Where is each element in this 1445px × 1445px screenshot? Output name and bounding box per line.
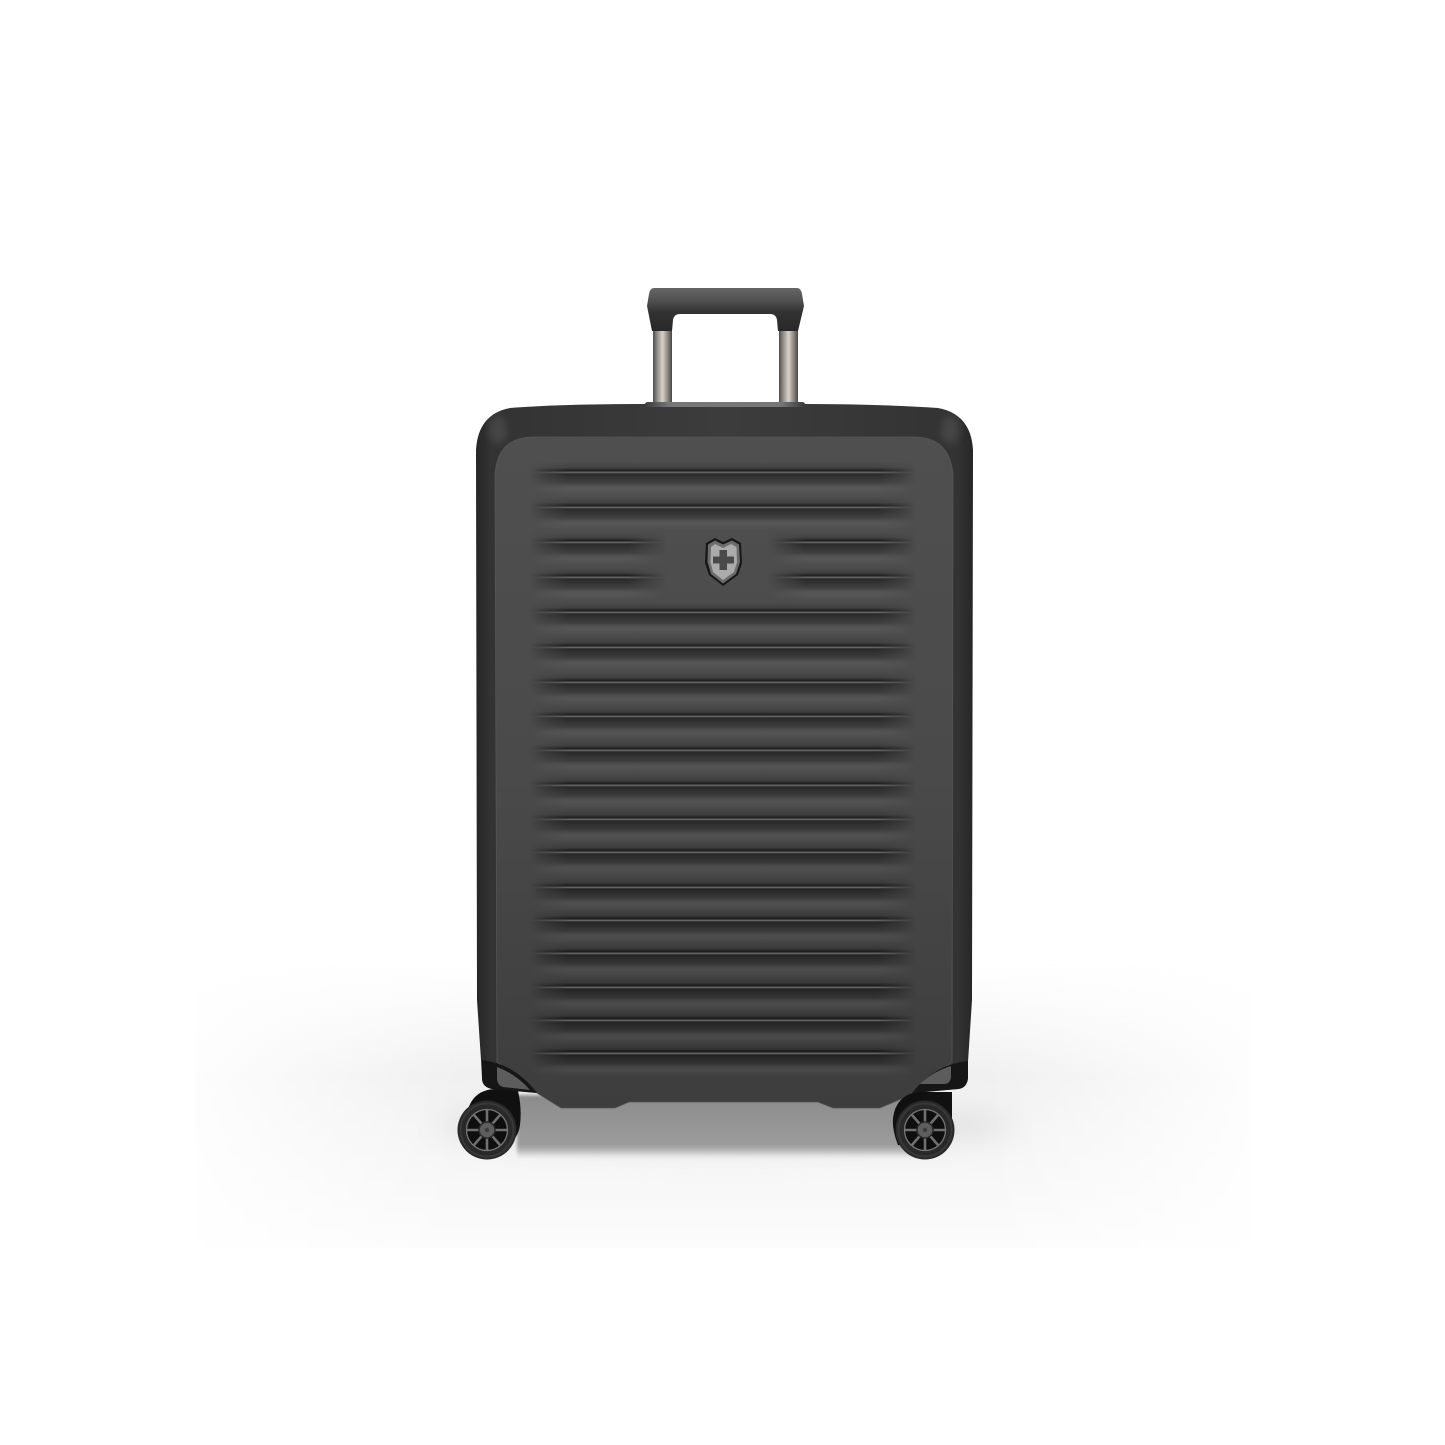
left wheel housing (466, 1089, 521, 1146)
floor glow (322, 1030, 1123, 1176)
soft shadow halo (435, 1101, 1015, 1149)
outer shell (476, 404, 973, 1108)
top lid highlight (645, 402, 805, 407)
telescopic handle (647, 288, 804, 406)
suitcase body (476, 402, 973, 1108)
logo: shield with cross (705, 538, 742, 586)
front panel (495, 437, 953, 1108)
grip (647, 288, 804, 331)
left corner wedge (497, 1067, 530, 1090)
product illustration: suitcase (322, 288, 1123, 1182)
right pole (779, 328, 798, 406)
cast shadow under suitcase (517, 1095, 925, 1160)
right wheel (893, 1092, 954, 1160)
left corner guard (482, 1060, 537, 1093)
right wheel housing (893, 1092, 952, 1146)
right corner wedge (920, 1066, 951, 1084)
shell corner highlights (489, 416, 959, 444)
right corner guard (912, 1061, 968, 1093)
left pole (653, 328, 672, 406)
left wheel (458, 1089, 521, 1160)
ribs (530, 462, 916, 1077)
